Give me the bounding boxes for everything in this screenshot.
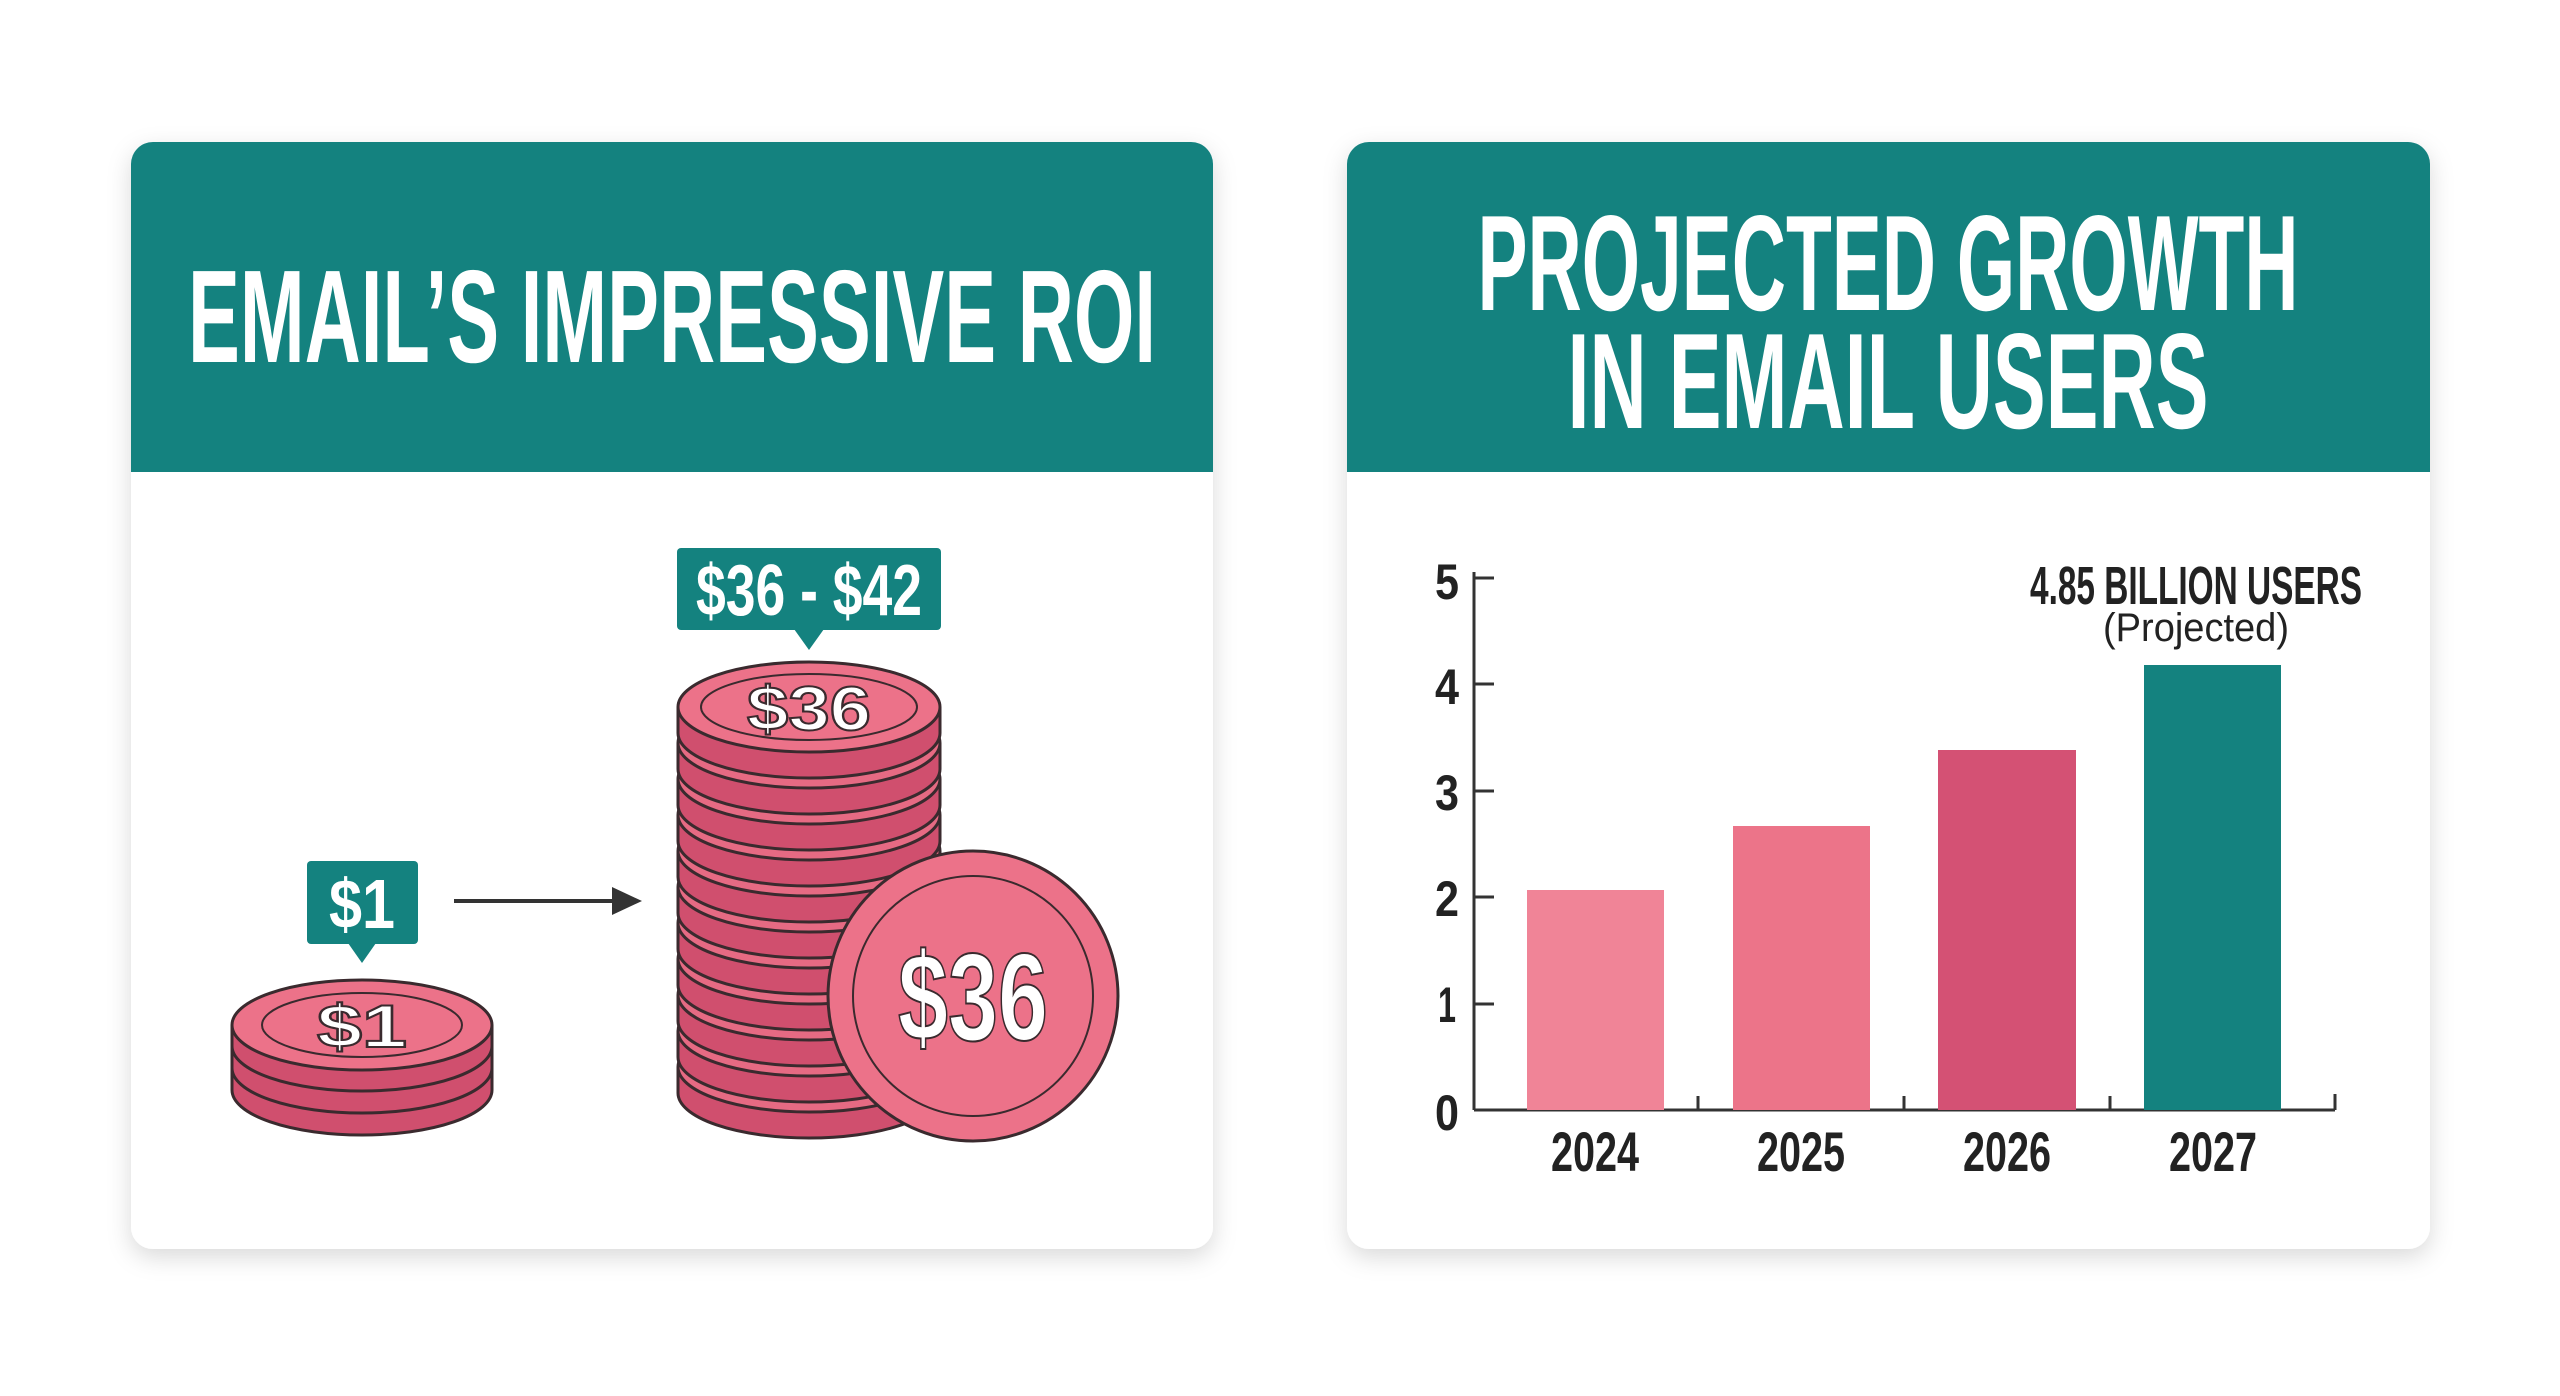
x labels (1551, 1120, 2257, 1183)
callout: 4.85 billion users: (Projected) (2103, 606, 2289, 650)
bars (1527, 890, 1664, 1110)
callout: 4.85 billion users: 4.85 BILLION USERS (2030, 556, 2362, 616)
header: growth (1347, 142, 2430, 472)
header: ROI (131, 142, 1213, 472)
tag: $1 (307, 861, 418, 963)
y labels: 4 (1435, 659, 1459, 715)
y labels: 1 (1438, 977, 1456, 1033)
title: Email's impressive ROI: EMAIL’S IMPRESSIVE ROI (188, 243, 1156, 390)
title: Projected growth in email users (1478, 187, 2298, 457)
y labels (1435, 554, 1459, 1141)
axes (1474, 572, 2335, 1110)
tall coin stack $36 (678, 662, 940, 1138)
small coin stack $1 (232, 980, 492, 1135)
coin label $36 top: $36 (747, 675, 871, 744)
x labels: 2024 (1551, 1120, 1639, 1183)
big front coin $36 (828, 851, 1118, 1141)
bar chart (1435, 554, 2362, 1183)
big front coin $36: $36 (898, 929, 1048, 1067)
y labels: 5 (1435, 554, 1459, 610)
coin label $1: $1 (317, 993, 407, 1060)
tag: $1: $1 (329, 865, 395, 943)
tag: $36 - $42 (677, 548, 941, 650)
y labels: 0 (1435, 1085, 1459, 1141)
panel: projected growth (1347, 142, 2430, 1249)
arrow (454, 887, 642, 915)
x labels: 2025 (1757, 1120, 1845, 1183)
x labels: 2026 (1963, 1120, 2051, 1183)
callout: 4.85 billion users (2030, 556, 2362, 650)
y labels: 3 (1435, 765, 1459, 821)
tag: $36 - $42: $36 - $42 (696, 551, 922, 631)
panel: email ROI (131, 142, 1213, 1249)
x labels: 2027 (2169, 1120, 2257, 1183)
y labels: 2 (1435, 871, 1459, 927)
